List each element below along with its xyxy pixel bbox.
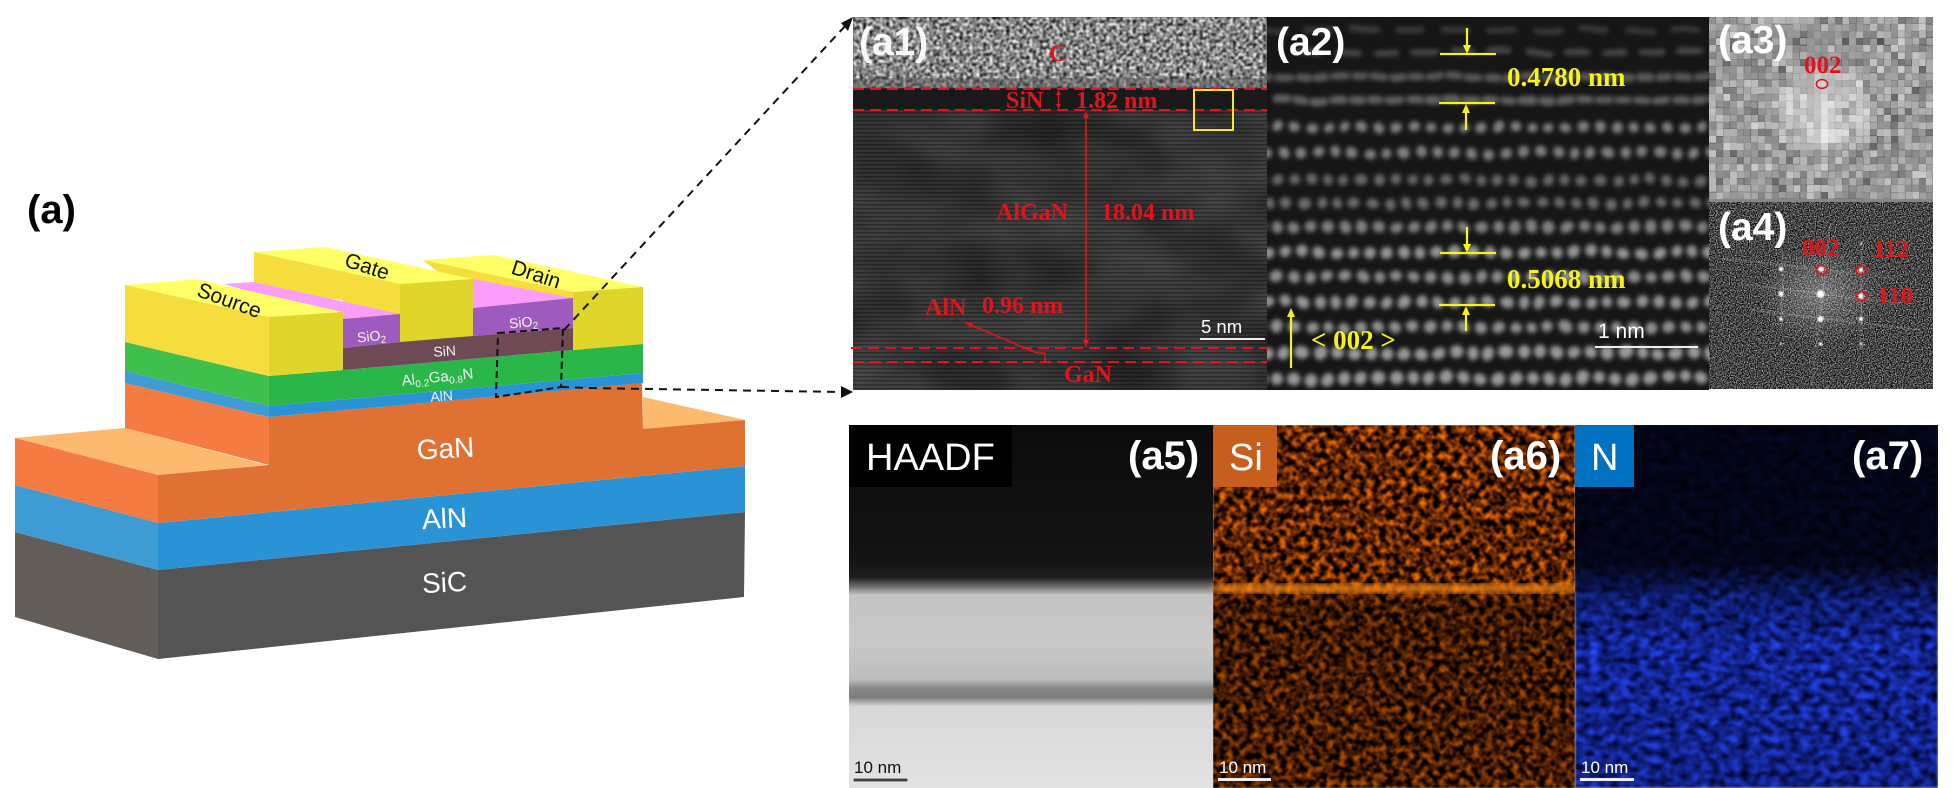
- label 002: 002: [1802, 235, 1840, 262]
- panel: a6 Si map: [1213, 425, 1575, 788]
- panel: a7 N map: [1575, 425, 1938, 788]
- contact: Drain: [423, 255, 643, 350]
- label 002: 002: [1804, 52, 1842, 79]
- label SiO2 left: 2: [380, 334, 387, 346]
- SiN thickness arrow: [1056, 90, 1061, 109]
- AlGaN thickness arrow: [1083, 111, 1089, 347]
- tag a1: (a1): [859, 21, 928, 64]
- interface dashed lines: [851, 89, 1267, 362]
- label GaN: GaN: [416, 432, 475, 465]
- spacing marker bottom: [1439, 227, 1496, 331]
- layer: thin AlN: [125, 371, 643, 417]
- label 0.5068 nm: 0.5068 nm: [1507, 264, 1626, 294]
- label AlGaN: AlGaN: [996, 200, 1069, 226]
- device schematic: [15, 247, 745, 659]
- label AlGaN: N: [462, 365, 474, 383]
- SiO2 right block: [473, 279, 573, 336]
- HAADF tag: [849, 425, 1012, 487]
- label 0.96 nm: 0.96 nm: [982, 293, 1063, 319]
- label SiC: SiC: [421, 566, 468, 599]
- panel: a4 FFT spots: [1709, 202, 1933, 389]
- circles on spots: [1816, 266, 1867, 300]
- label AlGaN: Al: [401, 371, 416, 390]
- arrow to a1 top corner: [564, 17, 853, 330]
- label 18.04 nm: 18.04 nm: [1101, 200, 1194, 226]
- tag a5: (a5): [1128, 434, 1199, 478]
- label Gate: Gate: [342, 249, 392, 285]
- SiO2 left block: [224, 282, 400, 348]
- N tag: N: [1591, 437, 1618, 479]
- diffraction spots: [1722, 225, 1920, 385]
- direction arrow 002: [1287, 308, 1295, 368]
- tag a6: (a6): [1490, 434, 1561, 478]
- layer: AlN buffer: [15, 466, 745, 570]
- label SiO2 right: SiO: [508, 313, 533, 331]
- label SiO2 right: 2: [532, 320, 539, 332]
- Si interface band: [1213, 584, 1575, 593]
- Si tag: Si: [1229, 437, 1263, 479]
- label AlGaN: 0.8: [449, 374, 464, 387]
- scale bar a5: [853, 758, 908, 782]
- scale bar a6: 10 nm: [1219, 758, 1266, 777]
- label SiN: SiN: [433, 342, 456, 360]
- label 110: 110: [1877, 283, 1913, 310]
- panel: a2 atomic lattice: [1260, 17, 1720, 390]
- layer: AlGaN: [125, 342, 643, 406]
- scale bar a7: 10 nm: [1581, 758, 1628, 777]
- label GaN: GaN: [1064, 362, 1113, 388]
- panel: a1 TEM cross-section: [851, 17, 1267, 390]
- scale bar 1 nm: 1 nm: [1598, 320, 1645, 343]
- label AlN: AlN: [421, 502, 468, 535]
- tag a4: (a4): [1718, 206, 1787, 249]
- Si tag: [1213, 425, 1277, 487]
- yellow selection box: [1194, 90, 1233, 130]
- scale bar a5: 10 nm: [854, 758, 901, 777]
- label 112: 112: [1873, 236, 1909, 263]
- panel: a3 FFT pixelated: [1709, 17, 1933, 203]
- panel: a5 HAADF: [849, 425, 1213, 788]
- spacing marker top: [1439, 28, 1496, 130]
- dashed zoom box: [496, 328, 563, 397]
- label 0.4780 nm: 0.4780 nm: [1507, 62, 1626, 92]
- scale bar 5 nm: 5 nm: [1201, 316, 1242, 337]
- tag a3: (a3): [1718, 19, 1787, 62]
- SiN layer: [343, 328, 573, 370]
- layer: SiC substrate: [15, 512, 745, 659]
- circle 002: [1816, 80, 1828, 88]
- label thin AlN: AlN: [430, 387, 453, 405]
- label SiO2 left: SiO: [356, 327, 381, 345]
- contact: Source: [125, 279, 343, 376]
- layer: GaN: [15, 383, 745, 523]
- scale bar 5 nm: [1200, 316, 1265, 340]
- panel label (a): (a): [27, 188, 76, 232]
- label 1.82 nm: 1.82 nm: [1076, 88, 1157, 114]
- label Drain: Drain: [509, 256, 563, 294]
- HAADF tag: HAADF: [866, 437, 995, 479]
- label AlGaN: 0.2: [415, 378, 430, 390]
- label SiN: SiN: [1006, 88, 1044, 114]
- label C: C: [1049, 41, 1066, 67]
- label Source: Source: [194, 279, 264, 323]
- tag a7: (a7): [1852, 434, 1923, 478]
- AlN pointer arrow: [965, 322, 1045, 361]
- arrow to a1 bottom corner: [561, 386, 853, 398]
- tag a2: (a2): [1276, 21, 1345, 64]
- N tag: [1575, 425, 1634, 487]
- label 002 direction: < 002 >: [1311, 325, 1396, 355]
- label AlN: AlN: [925, 295, 967, 321]
- contact: Gate: [254, 247, 473, 347]
- scale bar 1 nm: [1595, 320, 1698, 348]
- label AlGaN: Ga: [428, 368, 450, 387]
